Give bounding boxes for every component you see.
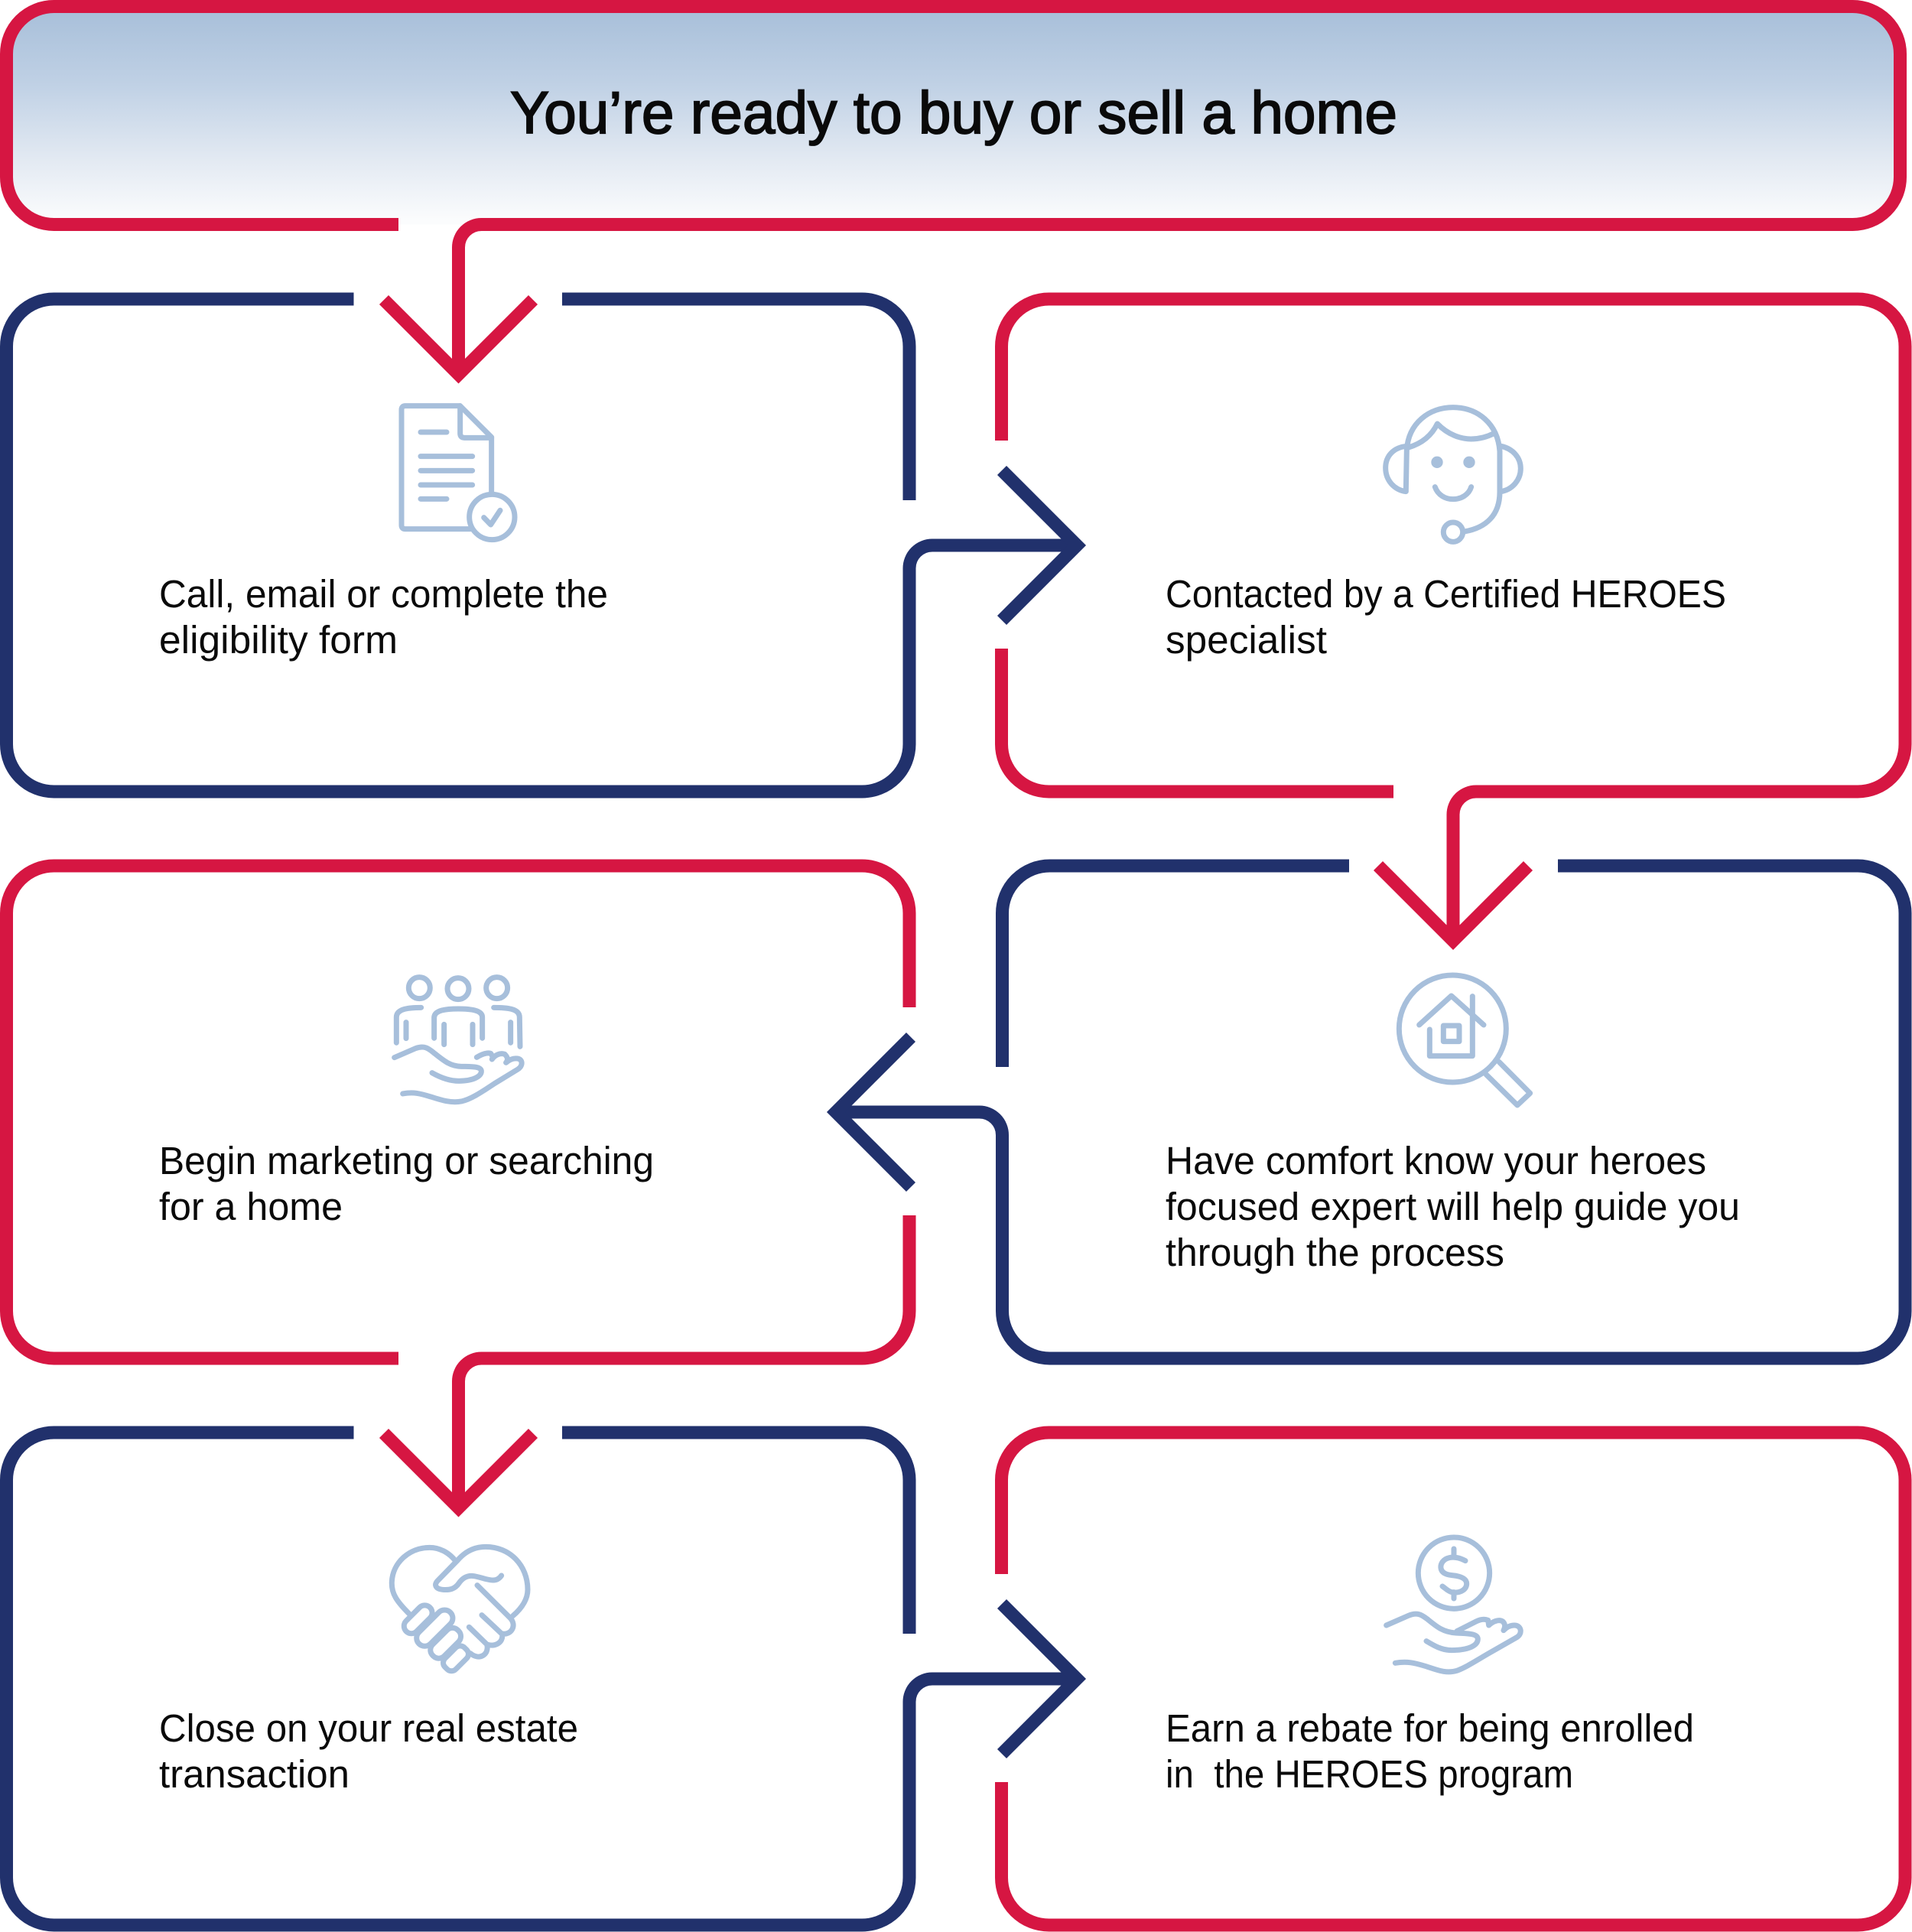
step 5 text: Close on your real estate <box>159 1706 578 1750</box>
step 5 text <box>159 1706 578 1796</box>
panel: step 6 earn a rebate <box>1002 1433 1905 1925</box>
icon: three people above open hand <box>395 977 522 1102</box>
step 3 text: focused expert will help guide you <box>1166 1185 1740 1228</box>
panel: step 4 begin marketing or searching <box>6 866 911 1508</box>
step 2 text <box>1166 572 1726 662</box>
step 4 text: for a home <box>159 1185 343 1228</box>
step 4 border and arrow connector <box>6 866 909 1508</box>
panel: step 5 close on transaction <box>6 1433 1077 1925</box>
arrow: step 5 to step 6 <box>1002 1604 1077 1754</box>
header gradient fill <box>6 6 1900 225</box>
step 4 text: Begin marketing or searching <box>159 1139 654 1182</box>
icon: smiling agent with headset <box>1386 408 1520 542</box>
step 6 text: Earn a rebate for being enrolled <box>1166 1706 1694 1750</box>
step 1 text <box>159 572 608 662</box>
step 3 text: Have comfort know your heroes <box>1166 1139 1706 1182</box>
step 6 text: in the HEROES program <box>1166 1752 1573 1796</box>
step 6 text <box>1166 1706 1694 1796</box>
panel: step 3 comfort with expert <box>837 866 1905 1358</box>
step 2 text: specialist <box>1166 618 1327 662</box>
step 1 text: eligibility form <box>159 618 398 662</box>
arrow: step 1 to step 2 <box>1002 470 1077 620</box>
step 3 text <box>1166 1139 1740 1274</box>
panel: step 1 eligibility form <box>6 299 1077 792</box>
header border with connector to step 1 <box>6 6 1900 374</box>
step 5 border and arrow connector <box>6 1433 1077 1925</box>
icon: dollar coin above open hand <box>1387 1537 1520 1672</box>
step 1 border and arrow connector <box>6 299 1077 792</box>
icon: magnifying glass over house <box>1399 975 1530 1105</box>
step 2 border and arrow connector <box>1002 299 1905 940</box>
step 1 text: Call, email or complete the <box>159 572 608 616</box>
step 5 text: transaction <box>159 1752 350 1796</box>
step 6 border <box>1002 1433 1905 1925</box>
step 4 text <box>159 1139 654 1228</box>
icon: handshake forming a heart <box>392 1547 528 1673</box>
panel: header <box>6 6 1900 374</box>
arrow: step 4 down to step 5 <box>384 1433 533 1508</box>
panel: step 2 contacted by specialist <box>1002 299 1905 940</box>
step 3 border and arrow connector <box>837 866 1905 1358</box>
title: You’re ready to buy or sell a home <box>510 79 1397 146</box>
arrow: step 2 down to step 3 <box>1378 866 1528 941</box>
step 2 text: Contacted by a Certified HEROES <box>1166 572 1726 616</box>
step 3 text: through the process <box>1166 1231 1504 1274</box>
icon: document with check <box>402 406 515 540</box>
arrow: step 3 to step 4 <box>836 1037 911 1187</box>
arrow: header down to step 1 <box>384 300 533 375</box>
